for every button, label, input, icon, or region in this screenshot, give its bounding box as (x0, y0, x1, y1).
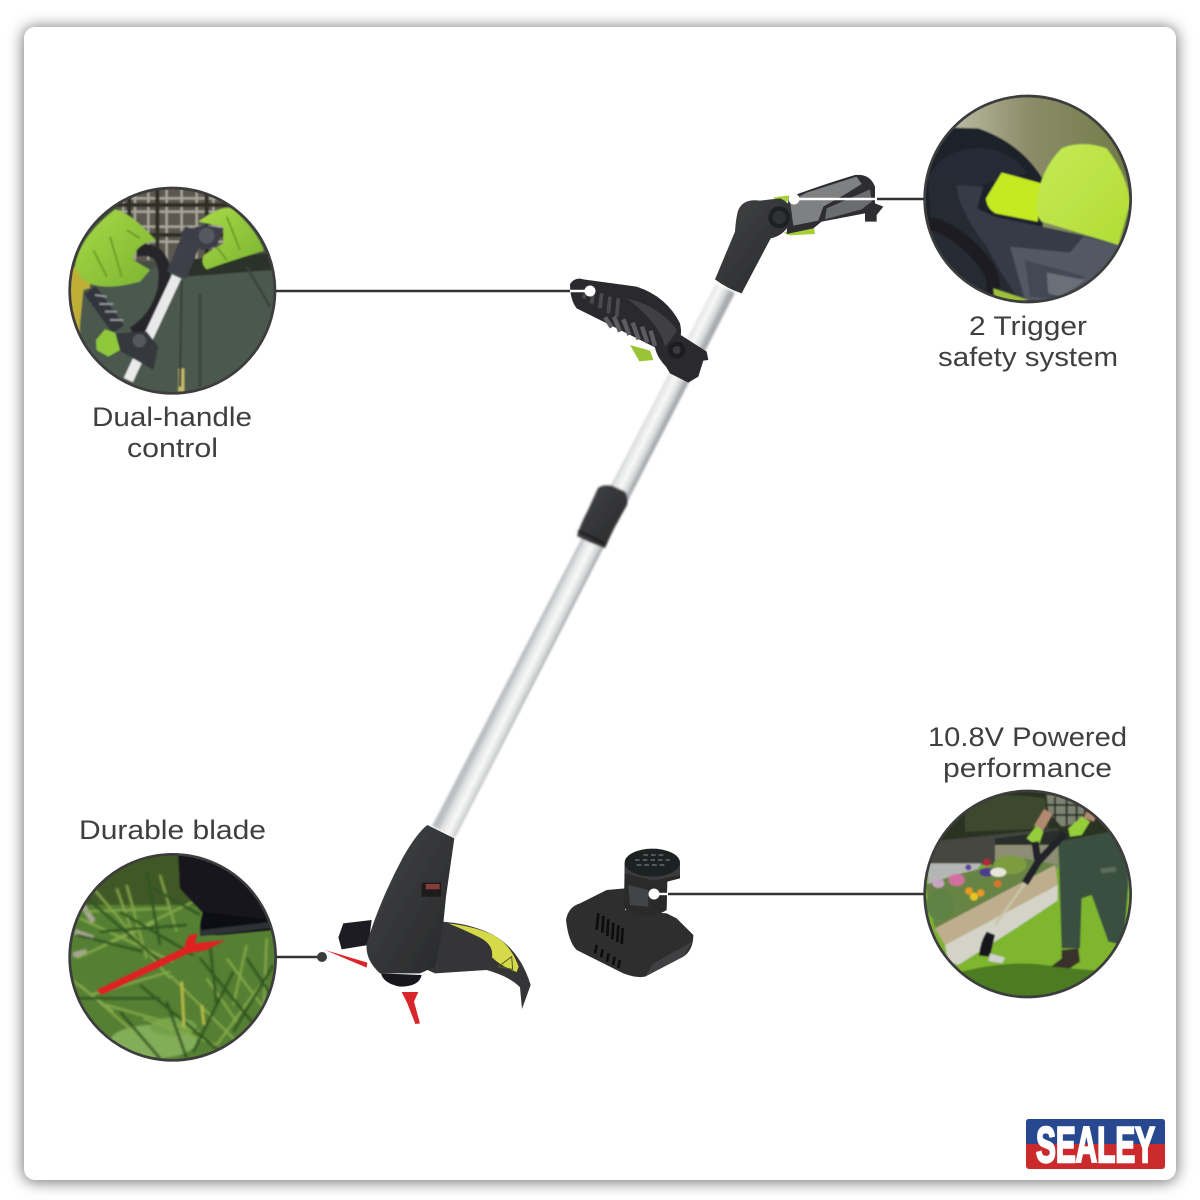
label: dual-handle control: Dual-handle (92, 402, 252, 432)
photo: man trimming lawn (922, 788, 1135, 1002)
cutting head guard (338, 825, 531, 1009)
leader line with dot (276, 952, 327, 962)
photo: gloved hands on handle (67, 185, 280, 398)
red cutting blades (325, 950, 420, 1024)
leader line (648, 888, 924, 900)
side handle (570, 279, 708, 383)
callout: 10.8V powered performance (648, 722, 1135, 1002)
callout: 2 trigger safety system (788, 93, 1135, 372)
trimmer product (325, 175, 883, 1024)
label: 2 trigger safety system: safety system (938, 342, 1118, 372)
callout: dual-handle control (67, 185, 595, 463)
label: dual-handle control: control (127, 433, 218, 463)
leader line (788, 194, 924, 204)
leader line (276, 286, 596, 296)
label: 10.8V powered performance: performance (943, 753, 1112, 783)
label: 2 trigger safety system (938, 311, 1118, 372)
photo: red blade in grass (67, 852, 280, 1065)
label: dual-handle control (92, 402, 252, 463)
battery charger (566, 888, 693, 977)
label: 10.8V powered performance (928, 722, 1127, 783)
battery (624, 849, 680, 916)
callout: durable blade (67, 815, 327, 1065)
label: 2 trigger safety system: 2 Trigger (969, 311, 1087, 341)
label: durable blade: Durable blade (79, 815, 266, 845)
telescopic shaft (432, 283, 735, 838)
rear trigger handle (715, 175, 883, 293)
label: 10.8V powered performance: 10.8V Powered (928, 722, 1127, 752)
photo: trigger close-up (922, 93, 1135, 307)
shaft collar (577, 485, 627, 548)
